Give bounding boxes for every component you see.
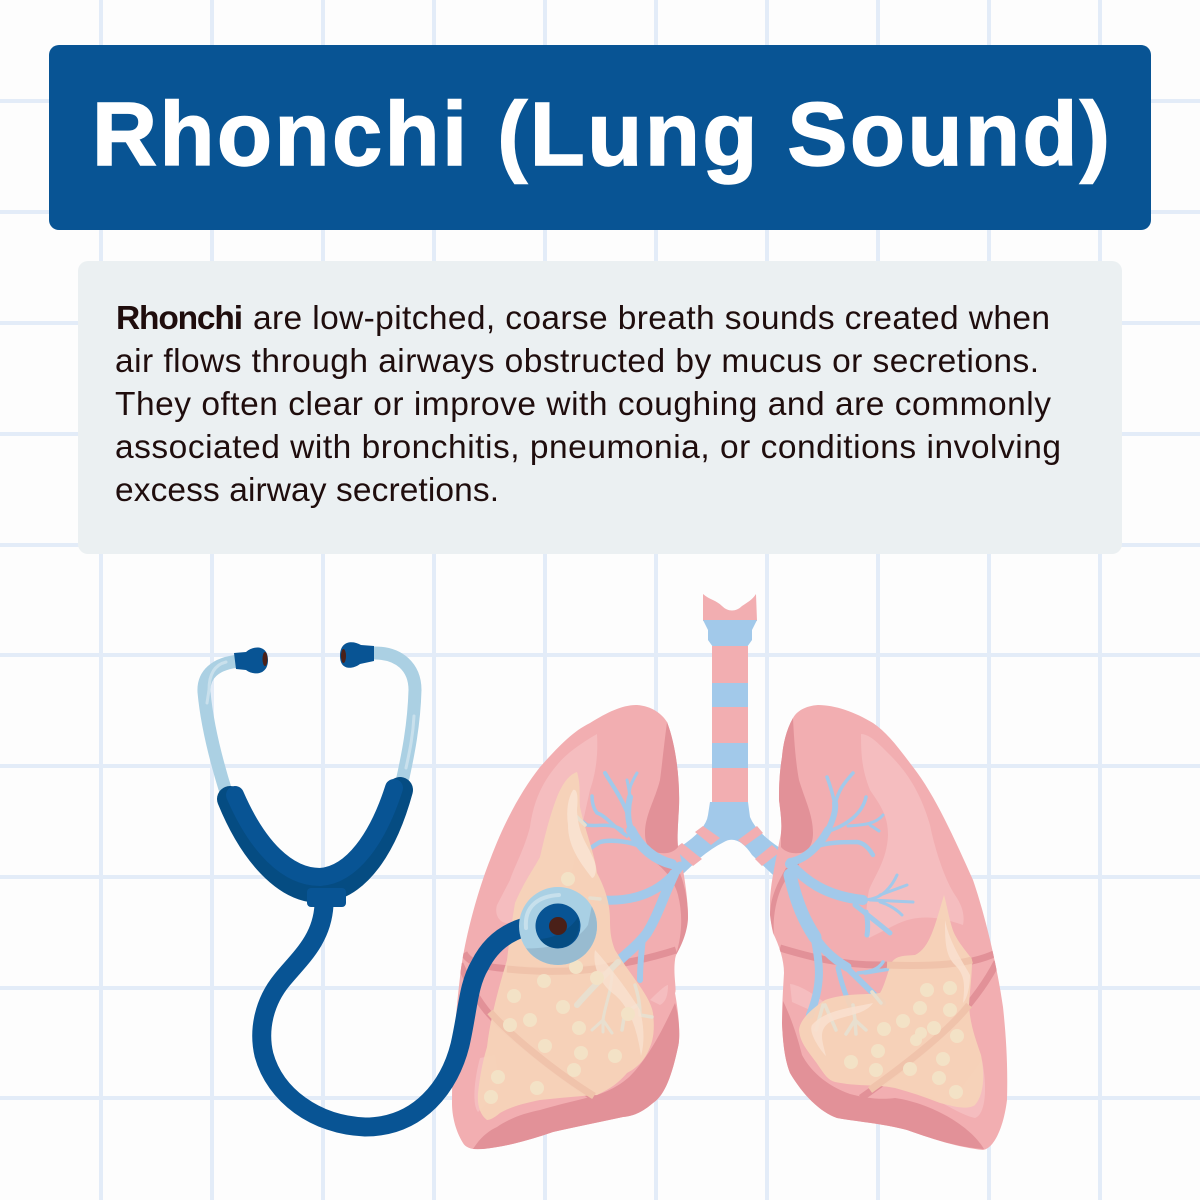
stethoscope xyxy=(204,642,610,1127)
definition text xyxy=(115,300,1061,509)
bronchial tree xyxy=(790,773,913,1015)
trachea and main bronchi xyxy=(645,594,815,896)
definition text: They often clear or improve with coughing and are commonly xyxy=(115,386,1051,423)
pale bronchi inside mucus xyxy=(576,816,652,1033)
mucus xyxy=(478,772,654,1120)
mucus sheen xyxy=(945,920,970,1003)
right earpiece xyxy=(340,642,374,668)
right lung xyxy=(770,705,1007,1150)
lower highlight xyxy=(790,984,825,1010)
definition text: excess airway secretions. xyxy=(115,472,499,509)
mucus dots xyxy=(484,872,635,1104)
chest piece xyxy=(519,887,597,965)
definition text: are low-pitched, coarse breath sounds created when xyxy=(253,300,1050,337)
fissure through mucus xyxy=(507,965,615,971)
lower lobe shadow xyxy=(473,1003,679,1149)
lower lobe shadow xyxy=(782,1001,984,1149)
mucus xyxy=(799,895,983,1108)
ear tubes xyxy=(204,653,415,792)
mucus sheen xyxy=(567,790,596,878)
lower highlight xyxy=(474,1055,500,1112)
title: Rhonchi (Lung Sound) xyxy=(92,85,1110,185)
fissures xyxy=(780,948,997,1098)
panel: definition xyxy=(78,261,1122,554)
left lung xyxy=(452,705,688,1149)
highlight xyxy=(496,734,597,925)
bronchial tree xyxy=(576,773,680,980)
definition text: Rhonchi xyxy=(116,300,243,337)
medial shadow xyxy=(645,722,679,853)
medial shadow xyxy=(779,718,813,853)
highlight xyxy=(861,734,964,938)
title banner xyxy=(49,45,1151,230)
left earpiece xyxy=(234,647,268,673)
fissure through mucus xyxy=(887,960,972,965)
pale bronchi inside mucus xyxy=(816,992,881,1034)
headset yoke xyxy=(230,788,400,907)
definition text: associated with bronchitis, pneumonia, or conditions involving xyxy=(115,429,1061,466)
definition text: air flows through airways obstructed by mucus or secretions. xyxy=(115,343,1039,380)
fissures xyxy=(460,950,676,1098)
main tube xyxy=(262,905,525,1127)
mucus dots xyxy=(844,981,964,1099)
lungs illustration xyxy=(452,594,1007,1150)
